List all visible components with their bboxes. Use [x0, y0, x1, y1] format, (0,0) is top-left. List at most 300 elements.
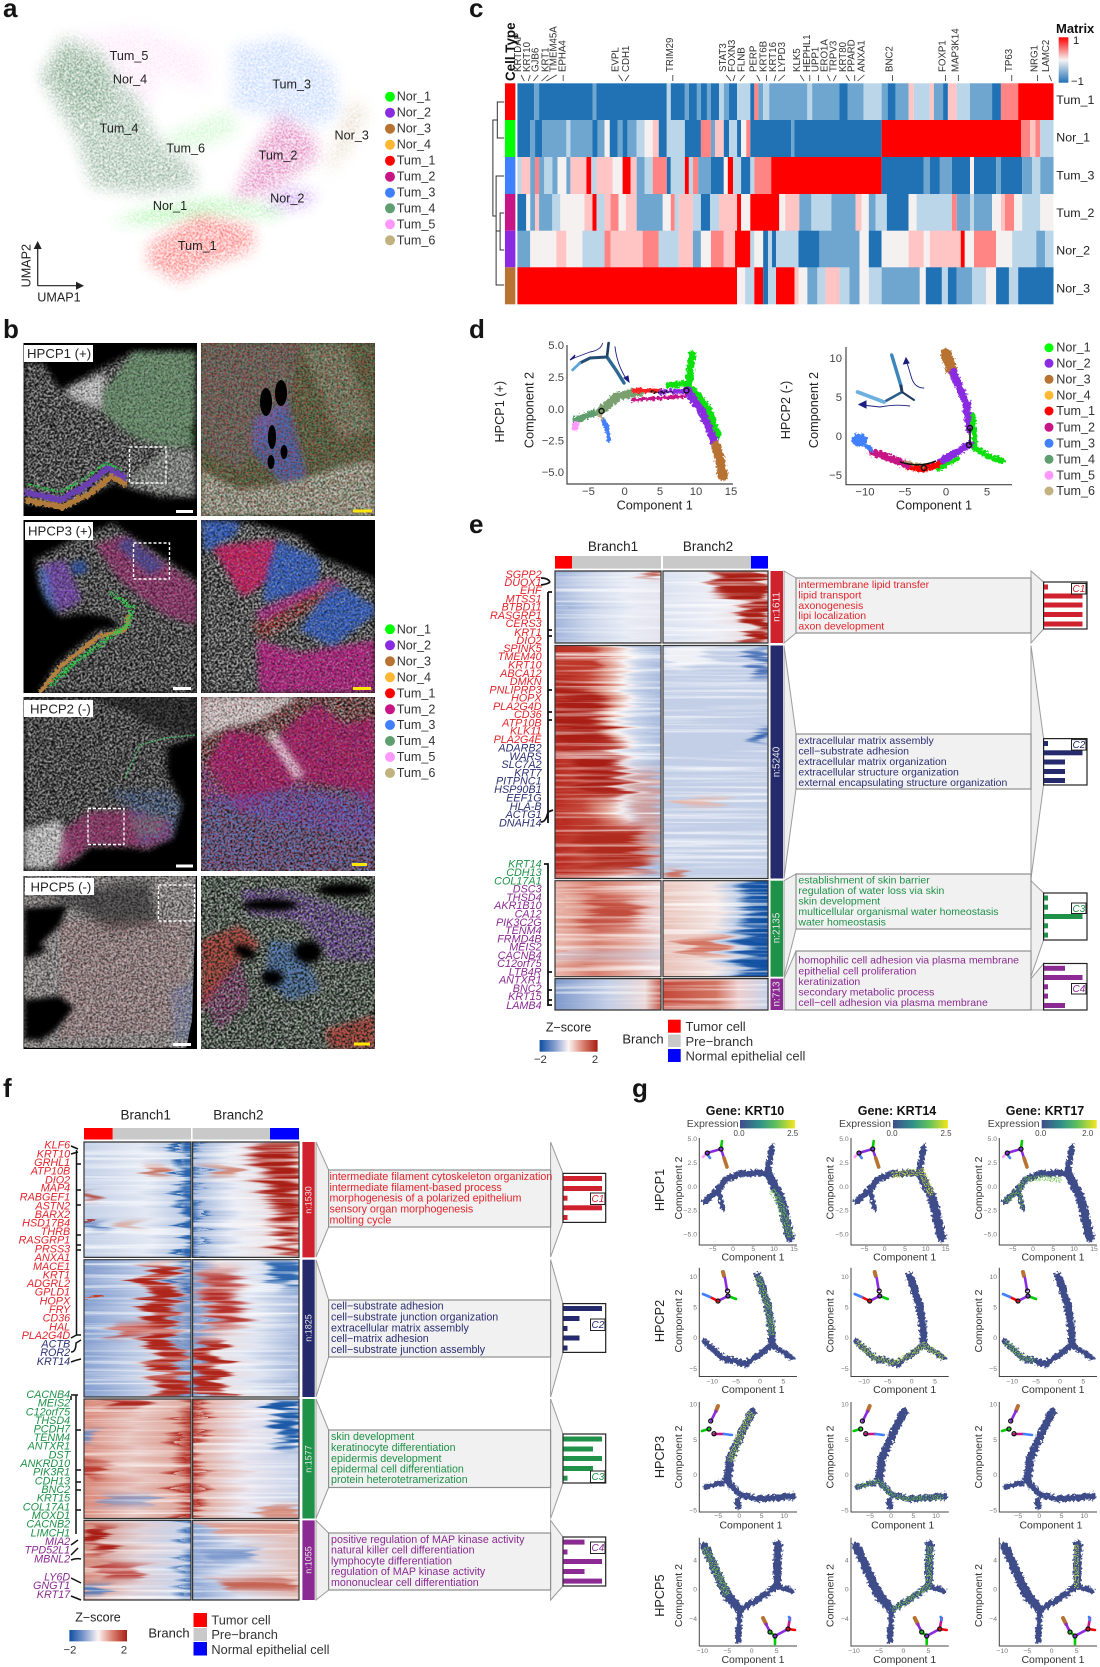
GO term box C1 f: morphogenesis of a polarized epithelium: [330, 1193, 521, 1205]
column header KRT10: Gene: KRT10: [706, 1104, 784, 1118]
enrichment bars C1 e: [1044, 582, 1087, 629]
branch headings f: Branch2: [213, 1108, 264, 1122]
gene labels f: HAL: [49, 1321, 70, 1333]
gene labels f: FRY: [49, 1304, 71, 1316]
enrichment bars C2 e: [1044, 739, 1087, 785]
legend d: cell types: Tum_2: [1056, 420, 1095, 434]
legend d: cell types: Tum_4: [1056, 452, 1095, 466]
plot HPCP2 KRT10: 10: [689, 1274, 697, 1281]
GO term box C4 e: homophilic cell adhesion via plasma membrane: [798, 955, 1019, 967]
legend d: cell types: Nor_1: [1056, 341, 1091, 355]
heatmap row labels: Nor_1: [1056, 131, 1090, 145]
plot HPCP2 KRT17: 0: [1058, 1378, 1062, 1385]
gene labels f: ASTN2: [34, 1200, 70, 1212]
GO term box C3 f: epidermal cell differentiation: [331, 1464, 464, 1476]
heatmap f, cluster 4 right: [193, 1521, 298, 1600]
plot HPCP5 KRT14: 0: [845, 1586, 849, 1594]
plot HPCP5 KRT10: 4: [693, 1558, 697, 1564]
inset selection box: [88, 808, 124, 844]
heatmap e, cluster 4 left: [556, 979, 660, 1010]
plot HPCP3 KRT14: [825, 1402, 949, 1532]
plot HPCP5 KRT10: −5: [723, 1648, 731, 1655]
plot HPCP2 KRT17: 10: [989, 1274, 997, 1281]
plot HPCP5 KRT17: 0: [993, 1586, 997, 1594]
column header KRT17: [988, 1104, 1097, 1138]
legend a: cell types: Nor_4: [397, 138, 431, 152]
plot HPCP3 KRT17: Component 1: [1019, 1520, 1083, 1532]
legend b: cell types: Tum_1: [397, 686, 435, 700]
plot HPCP2 KRT17: −5: [1032, 1378, 1040, 1385]
plot HPCP1 KRT14: Component 1: [873, 1251, 936, 1263]
plot HPCP5 KRT14: [825, 1538, 949, 1666]
heatmap e, cluster 2 left: [556, 646, 660, 878]
GO term box C4 e: [796, 951, 1031, 1010]
GO term box C3 e: skin development: [798, 896, 880, 908]
plot HPCP3 KRT10: Component 2: [673, 1425, 685, 1489]
gene labels c: FOXP1: [938, 40, 948, 72]
gene labels c: EPHA4: [558, 40, 569, 72]
plot HPCP2 KRT10: −5: [732, 1378, 740, 1385]
cluster size bars f: n:1055: [304, 1546, 314, 1574]
UMAP cluster labels: Nor_2: [270, 191, 304, 205]
GO term box C2 e: extracellular structure organization: [798, 766, 959, 778]
legend b: cell types: Tum_2: [397, 702, 435, 716]
cluster size bars f: n:1530: [304, 1186, 314, 1214]
plot HPCP5 KRT17: Component 1: [1021, 1654, 1085, 1666]
plot HPCP5 KRT17: Component 2: [973, 1564, 985, 1627]
branch legend e: Tumor cell: [686, 1019, 746, 1034]
GO term box C3 f: protein heterotetramerization: [331, 1474, 468, 1486]
plot HPCP5 KRT10: −10: [697, 1648, 708, 1655]
UMAP cluster labels: Tum_6: [166, 141, 205, 155]
gene labels e: WARS: [509, 751, 542, 763]
gene labels f: GRHL1: [34, 1157, 70, 1169]
sample label HPCP5: HPCP5 (-): [30, 880, 91, 894]
gene labels e: PIK3C2G: [496, 917, 542, 929]
legend d: cell types: Tum_3: [1056, 436, 1095, 450]
z-score legend e: 2: [592, 1054, 598, 1066]
column header KRT14: Gene: KRT14: [858, 1104, 936, 1118]
gene labels c: PERP: [749, 46, 760, 72]
plot HPCP3 KRT17: 0: [993, 1472, 997, 1479]
heatmap e, cluster 3 left: [556, 881, 660, 976]
inset selection box: [130, 447, 166, 483]
gene labels f: C12orf75: [26, 1406, 71, 1418]
panel d: HPCP1 trajectory plot: HPCP1 (+): [493, 381, 507, 443]
gene labels e: AKR1B10: [493, 900, 542, 912]
tick labels: −5.0: [542, 467, 564, 479]
plot HPCP3 KRT17: 0: [1037, 1513, 1041, 1520]
gene labels e: HLA-B: [510, 801, 542, 813]
tick labels: 0.0: [548, 404, 564, 416]
gene labels e: KRT1: [514, 627, 542, 639]
sample label HPCP3: HPCP3 (+): [28, 524, 92, 538]
GO term box C3 f: [329, 1430, 551, 1488]
callout connectors f: [316, 1142, 563, 1600]
gene labels e: THSD4: [506, 892, 542, 904]
GO term box C2 f: cell−substrate junction organization: [331, 1312, 498, 1324]
tick labels: −2.5: [542, 436, 564, 448]
GO term box C2 f: cell−matrix adhesion: [331, 1333, 429, 1345]
UMAP axes arrows: [20, 241, 84, 305]
plot HPCP5 KRT10: −4: [689, 1616, 697, 1623]
plot HPCP5 KRT10: Component 1: [721, 1654, 785, 1666]
GO term box C2 f: cell−substrate adhesion: [331, 1301, 444, 1313]
plot HPCP2 KRT14: −5: [884, 1378, 892, 1385]
plot HPCP3 KRT10: 5: [693, 1437, 697, 1444]
gene labels c: KRT16: [768, 42, 779, 72]
GO term box C2 e: [796, 734, 1031, 789]
gene labels f: PCDH7: [34, 1424, 71, 1436]
gene labels f: CACNB2: [26, 1519, 70, 1531]
tick labels: 10: [829, 353, 842, 365]
gene labels f: TPD52L1: [25, 1544, 70, 1556]
plot HPCP2 KRT14: −10: [858, 1378, 870, 1385]
panel d: HPCP2 trajectory plot: Component 1: [896, 499, 972, 513]
plot HPCP2 KRT14: 0: [845, 1335, 849, 1342]
plot HPCP2 KRT17: 5: [993, 1304, 997, 1311]
GO term box C1 e: lipid transport: [798, 590, 862, 602]
plot HPCP3 KRT10: −5: [714, 1513, 722, 1520]
branch legend f: [148, 1612, 329, 1657]
panel d: HPCP1 trajectory plot: Component 2: [522, 372, 536, 448]
heatmap row Nor_1: [517, 120, 1054, 157]
gene labels e: RASGRP1: [490, 610, 542, 622]
legend a: cell types: Nor_3: [397, 122, 431, 136]
plot HPCP1 KRT14: 5.0: [839, 1136, 849, 1143]
plot HPCP5 KRT14: −10: [848, 1648, 860, 1655]
legend a: cell types: Tum_6: [397, 233, 435, 247]
gene labels f: LY6D: [44, 1572, 70, 1584]
heatmap e, cluster 1 right: [664, 572, 768, 642]
gene labels f: KRT15: [37, 1493, 71, 1505]
plot HPCP1 KRT10: [673, 1136, 798, 1263]
panel b: HPCP3 whole slide: [24, 520, 197, 693]
heatmap row Nor_3: [517, 267, 1054, 304]
plot HPCP1 KRT17: −5: [1009, 1246, 1017, 1253]
plot HPCP3 KRT14: 0: [845, 1472, 849, 1479]
gene labels e: [489, 569, 543, 1012]
plot HPCP1 KRT17: 5.0: [988, 1136, 997, 1143]
tick labels: [542, 340, 737, 498]
gene labels f: GPLD1: [35, 1286, 70, 1298]
plot HPCP5 KRT17: −10: [997, 1648, 1008, 1655]
heatmap e, cluster 3 right: [664, 881, 768, 976]
gene labels e: SGPP2: [506, 569, 542, 581]
heatmap row labels: Tum_2: [1056, 206, 1095, 220]
enrichment bars C3 f: [563, 1434, 606, 1483]
heatmap f, cluster 3 left: [84, 1400, 190, 1518]
GO term box C1 f: [329, 1170, 552, 1227]
heatmap e, cluster 4 right: [664, 979, 768, 1010]
z-score legend f: 2: [121, 1644, 127, 1656]
gene labels f: PIK3R1: [33, 1467, 70, 1479]
plot HPCP2 KRT17: −5: [989, 1366, 997, 1373]
enrichment bars C4 e: [1044, 964, 1087, 1010]
gene labels f: [19, 1140, 72, 1601]
heatmap row labels: Tum_3: [1056, 168, 1095, 182]
plot HPCP2 KRT10: Component 1: [721, 1384, 785, 1396]
plot HPCP2 KRT17: [973, 1268, 1097, 1396]
plot HPCP3 KRT14: 5: [845, 1437, 849, 1444]
branch legend f: Pre−branch: [211, 1627, 278, 1642]
dendrogram: [493, 102, 504, 285]
gene labels e: ABCA12: [499, 668, 542, 680]
column header KRT10: Expression: [687, 1118, 739, 1130]
GO term box C4 f: regulation of MAP kinase activity: [331, 1566, 486, 1578]
plot HPCP3 KRT14: −5: [841, 1508, 849, 1515]
plot HPCP1 KRT14: 0: [883, 1246, 887, 1253]
panel label g: g: [632, 1073, 648, 1103]
plot HPCP2 KRT14: −5: [841, 1366, 849, 1373]
plot HPCP5 KRT14: Component 2: [825, 1564, 837, 1627]
UMAP cluster labels: Tum_2: [259, 149, 297, 163]
gene labels f: MIA2: [45, 1536, 70, 1548]
gene labels f: THSD4: [35, 1415, 70, 1427]
gene labels f: KRT10: [37, 1148, 70, 1160]
GO term box C3 e: water homeostasis: [797, 916, 886, 928]
plot HPCP5 KRT14: 0: [902, 1648, 906, 1655]
panel label d: d: [469, 314, 485, 344]
UMAP cluster labels: Tum_3: [272, 77, 311, 91]
plot HPCP1 KRT14: 15: [942, 1246, 950, 1253]
gene labels e: LTB4R: [509, 966, 542, 978]
GO term box C1 e: [796, 578, 1031, 633]
matrix colour legend: −1: [1071, 76, 1084, 88]
plot HPCP3 KRT14: 0: [889, 1513, 893, 1520]
UMAP cluster labels: Nor_3: [335, 129, 369, 143]
z-score legend e: −2: [534, 1054, 547, 1066]
gene labels e: HOPX: [511, 693, 542, 705]
plot HPCP3 KRT17: Component 2: [973, 1425, 985, 1489]
tick labels: −5: [582, 486, 595, 498]
heatmap f, cluster 1 right: [193, 1142, 298, 1257]
GO term box C3 e: multicellular organismal water homeostasis: [798, 906, 999, 918]
legend d: cell types: Nor_4: [1056, 388, 1091, 402]
gene labels e: BTBD11: [502, 602, 542, 614]
plot HPCP3 KRT10: 10: [781, 1513, 788, 1520]
gene labels f: ROR2: [40, 1347, 70, 1359]
cluster size bars e: [770, 571, 783, 1010]
GO term box C1 e: axonogenesis: [798, 600, 863, 612]
gene labels e: CDH13: [506, 867, 542, 879]
panel a: UMAP scatter: [40, 27, 369, 283]
tick labels: −5: [829, 470, 842, 482]
gene labels c: HEPHL1: [802, 34, 813, 72]
gene labels c: STAT3: [718, 43, 729, 72]
branch legend e: Normal epithelial cell: [686, 1048, 806, 1064]
UMAP cluster labels: Tum_1: [178, 239, 217, 253]
gene labels e: ADARB2: [497, 743, 542, 755]
GO term box C2 f: cell−substrate junction assembly: [331, 1344, 486, 1356]
legend a: cell types: [385, 90, 435, 247]
plot HPCP2 KRT14: 10: [841, 1274, 849, 1281]
heatmap row Tum_3: [517, 157, 1054, 194]
plot HPCP2 KRT10: [673, 1268, 797, 1396]
UMAP cluster labels: Nor_1: [153, 199, 187, 213]
enrichment bars C4 f: C4: [592, 1543, 605, 1554]
mini trajectory inset with arrows: [570, 343, 629, 383]
gene labels c: FOXN3: [727, 40, 738, 72]
plot HPCP5 KRT17: [973, 1538, 1097, 1666]
branch legend e: Pre−branch: [686, 1034, 753, 1049]
tick labels: 10: [690, 486, 702, 498]
GO term box C1 f: molting cycle: [330, 1214, 391, 1226]
row labels g: HPCP2: [653, 1300, 667, 1342]
plot HPCP1 KRT14: −2.5: [835, 1208, 849, 1215]
plot HPCP1 KRT10: 5.0: [688, 1136, 697, 1143]
plot HPCP5 KRT17: 4: [993, 1558, 997, 1564]
gene labels e: LAMB4: [506, 1000, 542, 1012]
plot HPCP1 KRT10: 2.5: [688, 1160, 697, 1167]
gene labels f: GNGT1: [33, 1580, 70, 1592]
gene labels c: KRT6B: [758, 41, 769, 72]
column header KRT17: Gene: KRT17: [1006, 1104, 1084, 1118]
UMAP axes arrows: UMAP1: [37, 291, 81, 305]
gene labels f: MBNL2: [34, 1553, 70, 1565]
plot HPCP5 KRT17: −4: [989, 1616, 997, 1623]
plot HPCP2 KRT17: Component 2: [973, 1289, 985, 1353]
column header KRT14: Expression: [839, 1118, 891, 1130]
heatmap e, cluster 2 right: [664, 646, 768, 878]
legend b: cell types: Tum_5: [397, 750, 435, 764]
gene labels f: CACNB4: [26, 1389, 70, 1401]
gene labels f: RABGEF1: [20, 1192, 70, 1204]
cluster size bars f: n:1577: [304, 1445, 314, 1473]
gene labels e: KRT7: [514, 767, 543, 779]
gene labels f: ANTXR1: [27, 1441, 70, 1453]
legend a: cell types: Tum_3: [397, 186, 435, 200]
gene labels c: ERO1A: [819, 39, 830, 72]
gene labels e: MTSS1: [506, 593, 542, 605]
gene labels e: PNLIPRP3: [489, 684, 542, 696]
panel label f: f: [3, 1073, 12, 1103]
inset selection box: [158, 885, 194, 921]
plot HPCP1 KRT17: 0: [1031, 1246, 1035, 1253]
GO term box C4 e: keratinization: [798, 976, 860, 988]
tick labels: 5: [657, 486, 663, 498]
column header KRT10: 0.0: [733, 1129, 745, 1138]
plot HPCP1 KRT14: Component 2: [825, 1156, 837, 1220]
enrichment bars C3 e: C3: [1072, 904, 1086, 915]
gene labels c: TP63: [1004, 49, 1015, 72]
tick labels: −10: [855, 486, 875, 498]
cluster size bars e: n:2135: [772, 912, 782, 943]
gene labels e: HSP90B1: [494, 784, 542, 796]
gene labels e: DIO2: [516, 635, 542, 647]
gene labels f: DST: [49, 1450, 72, 1462]
heatmap row Tum_2: [517, 194, 1054, 231]
enrichment bars C4 e: C4: [1072, 984, 1086, 995]
row labels g: [653, 1169, 667, 1617]
gene labels f: ANXA1: [34, 1252, 70, 1264]
panel label b: b: [3, 314, 19, 344]
plot HPCP2 KRT14: 5: [845, 1304, 849, 1311]
cluster size bars e: n:5240: [772, 746, 782, 777]
GO term box C2 e: extracellular matrix assembly: [798, 735, 935, 747]
UMAP cluster labels: [100, 49, 369, 253]
plot HPCP3 KRT17: −5: [989, 1508, 997, 1515]
row labels g: HPCP5: [653, 1574, 667, 1617]
gene labels e: MEIS2: [509, 942, 542, 954]
plot HPCP3 KRT10: [673, 1402, 797, 1532]
plot HPCP2 KRT10: 0: [758, 1378, 762, 1385]
branch headings f: Branch1: [121, 1108, 171, 1122]
plot HPCP3 KRT10: 0: [693, 1472, 697, 1479]
plot HPCP1 KRT14: [825, 1136, 950, 1263]
plot HPCP3 KRT14: Component 1: [871, 1520, 934, 1532]
cluster size bars f: [302, 1142, 315, 1600]
panel b: HPCP2 whole slide: [24, 697, 197, 871]
gene labels f: MEIS2: [38, 1398, 70, 1410]
plot HPCP5 KRT10: Component 2: [673, 1564, 685, 1627]
GO term box C1 f: intermediate filament-based process: [330, 1182, 502, 1194]
plot HPCP1 KRT17: 10: [1070, 1246, 1078, 1253]
legend b: cell types: Nor_1: [397, 622, 431, 636]
legend b: cell types: Nor_4: [397, 670, 431, 684]
GO term box C3 e: establishment of skin barrier: [798, 875, 930, 887]
legend b: cell types: Nor_2: [397, 638, 431, 652]
gene labels f: KRT1: [43, 1269, 70, 1281]
enrichment bars C2 f: [563, 1304, 606, 1352]
sample label HPCP2: HPCP2 (-): [30, 702, 91, 716]
GO term box C1 e: axon development: [798, 620, 884, 632]
enrichment bars C2 e: C2: [1072, 740, 1086, 751]
gene labels c: PPARD: [847, 39, 858, 72]
plot HPCP3 KRT14: 10: [932, 1513, 940, 1520]
column header KRT10: [687, 1104, 799, 1138]
tick labels: 5: [836, 392, 842, 404]
gene labels f: KRT17: [37, 1589, 71, 1601]
plot HPCP2 KRT17: 0: [993, 1335, 997, 1342]
gene labels f: HSD17B4: [22, 1217, 70, 1229]
plot HPCP1 KRT10: Component 2: [673, 1156, 685, 1220]
GO term box C2 e: external encapsulating structure organization: [798, 777, 1008, 789]
gene labels e: CA12: [515, 908, 542, 920]
GO term box C4 e: cell−cell adhesion via plasma membrane: [798, 997, 988, 1009]
z-score legend e: Z−score: [546, 1021, 591, 1035]
gene labels e: DSC3: [513, 884, 542, 896]
gene labels f: ATP10B: [30, 1166, 70, 1178]
gene labels c: KLK5: [792, 48, 803, 72]
gene labels e: TENM4: [505, 925, 542, 937]
plot HPCP3 KRT17: [973, 1402, 1097, 1532]
GO term box C3 f: epidermis development: [331, 1453, 442, 1465]
tick labels: −5: [899, 486, 911, 498]
gene labels e: TMEM40: [498, 651, 542, 663]
gene labels f: TENM4: [34, 1432, 70, 1444]
GO term box C2 e: cell−substrate adhesion: [798, 746, 909, 758]
gene labels e: PITPNC1: [496, 776, 542, 788]
plot HPCP1 KRT10: 10: [770, 1246, 778, 1253]
cluster size bars f: n:1825: [304, 1314, 314, 1342]
gene labels f: DIO2: [45, 1174, 70, 1186]
GO term box C1 f: sensory organ morphogenesis: [330, 1204, 473, 1216]
tick labels: 0: [621, 486, 628, 498]
GO term box C3 e: [796, 874, 1031, 929]
enrichment bars C3 e: [1044, 893, 1087, 940]
z-score legend e: [534, 1021, 598, 1066]
plot HPCP2 KRT17: −10: [1007, 1378, 1018, 1385]
panel b: HPCP2 zoom: [201, 697, 375, 871]
gene labels f: PRSS3: [35, 1243, 70, 1255]
plot HPCP1 KRT14: 2.5: [839, 1160, 849, 1167]
plot HPCP1 KRT10: −5.0: [684, 1231, 697, 1238]
z-score legend f: Z−score: [75, 1611, 121, 1625]
GO term box C2 f: extracellular matrix assembly: [331, 1322, 469, 1334]
branch legend e: [622, 1019, 806, 1064]
plot HPCP2 KRT14: 0: [910, 1378, 914, 1385]
